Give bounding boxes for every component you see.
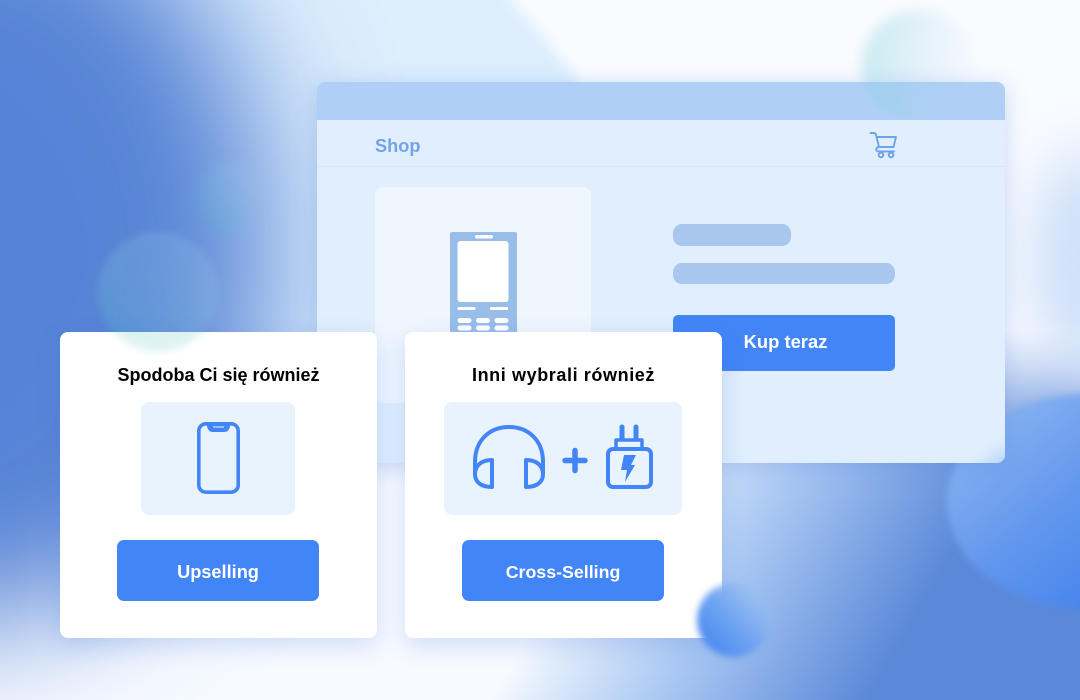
icon: shopping cart	[870, 132, 897, 158]
browser title bar	[317, 82, 1005, 120]
upselling button: Upselling	[177, 562, 259, 582]
buy now button	[673, 315, 895, 371]
blob reflections seen through the window	[864, 82, 1005, 463]
buy now button: Kup teraz	[744, 331, 827, 352]
icons: headphones plus charger	[473, 424, 653, 489]
icon: feature phone	[450, 232, 517, 332]
upselling button	[117, 540, 319, 601]
window inner clip	[317, 82, 1005, 463]
heading: cross-selling card: Inni wybrali również	[472, 365, 655, 385]
upselling product tile	[141, 402, 295, 515]
heading: upselling card: Spodoba Ci się również	[117, 365, 320, 385]
product image tile	[375, 187, 591, 403]
panel: shop browser window	[317, 82, 1005, 463]
product title placeholder	[673, 224, 791, 246]
panel: cross-selling card	[405, 332, 722, 638]
shop heading: Shop	[375, 136, 420, 156]
teal circle tint over card top	[111, 332, 205, 354]
cross-selling product tile	[444, 402, 682, 515]
panel: upselling card	[60, 332, 377, 638]
cross-selling button: Cross-Selling	[506, 562, 620, 582]
header divider	[317, 166, 1005, 167]
icon: smartphone	[197, 422, 240, 494]
product description placeholder	[673, 263, 895, 284]
cross-selling button	[462, 540, 664, 601]
decorative blue orb	[692, 580, 767, 660]
